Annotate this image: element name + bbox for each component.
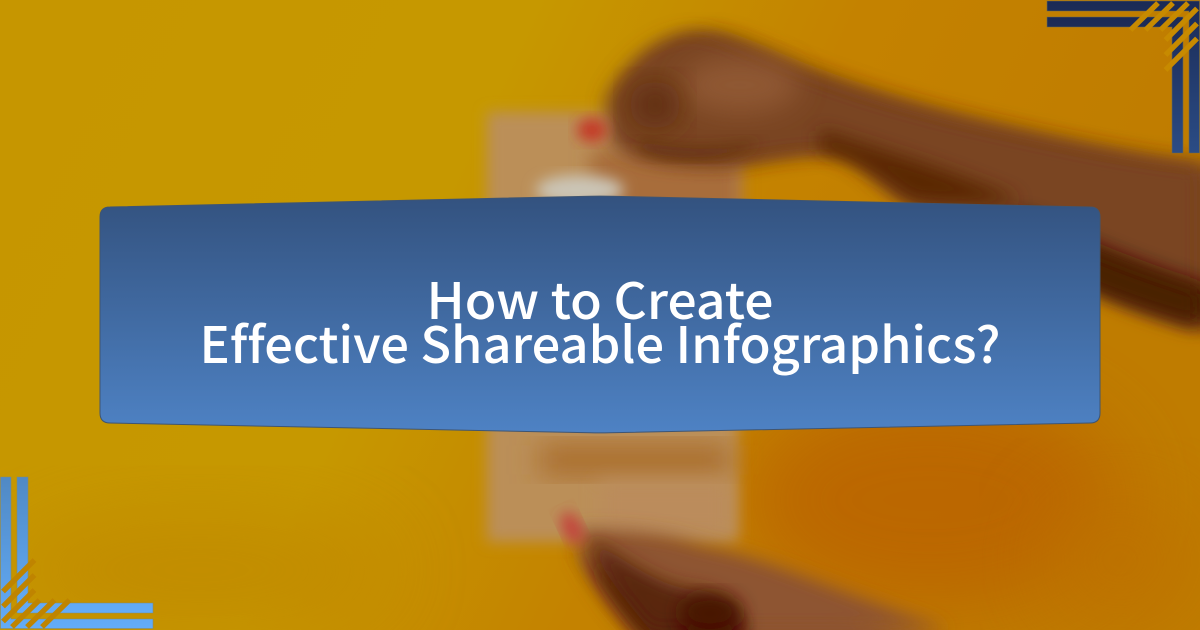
title text: Effective Shareable Infographics? <box>200 306 1001 378</box>
nail, upper <box>577 118 607 142</box>
title text <box>200 262 1001 378</box>
corner ornament: bottom left <box>0 477 153 628</box>
title text: How to Create <box>426 262 774 334</box>
lower hand <box>575 530 950 630</box>
corner ornament: top right <box>1047 1 1200 153</box>
banner panel <box>100 196 1100 433</box>
paper <box>487 112 738 542</box>
title banner <box>100 196 1100 433</box>
nail, lower <box>557 509 587 547</box>
upper hand and arm <box>605 33 1200 330</box>
